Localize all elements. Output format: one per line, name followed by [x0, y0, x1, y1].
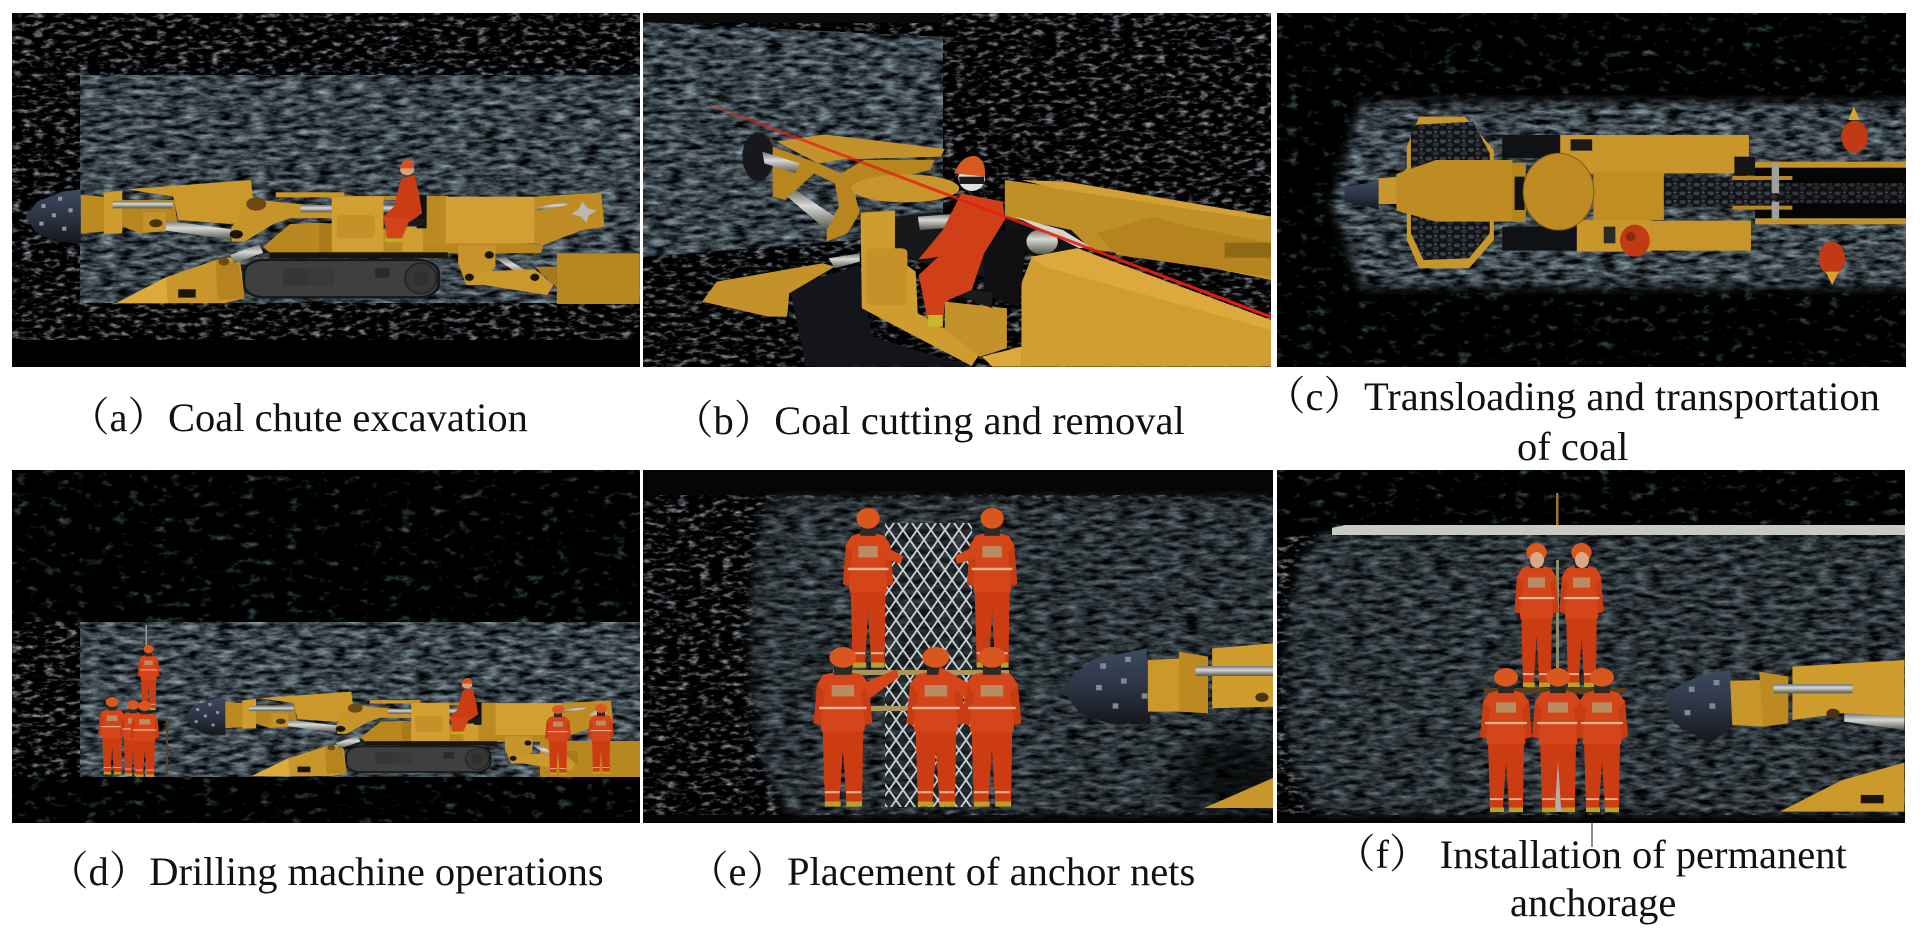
dark coal background [643, 13, 1271, 367]
support frame [1484, 688, 1626, 812]
caption b: （b）Coal cutting and removal [673, 398, 1185, 443]
lit rock face [742, 490, 1273, 820]
caption c: （c）Transloading and transportation [1265, 374, 1880, 419]
panel: (f) installation of permanent anchorage [1277, 470, 1905, 823]
panel: (b) coal cutting and removal [643, 13, 1271, 367]
miner top view lower [1819, 242, 1845, 285]
drill rod and support [146, 625, 168, 777]
miner near machine rear [545, 705, 571, 775]
roadheader machine [26, 160, 640, 304]
caption d: （d）Drilling machine operations [48, 849, 604, 894]
front shovel [1204, 778, 1273, 808]
miner lower left [1480, 668, 1532, 812]
leader line under panel f [1591, 823, 1593, 847]
roadheader top view [1345, 107, 1906, 285]
caption c: of coal [1517, 424, 1628, 469]
lit roadway rock face [80, 622, 640, 777]
operator top view [1620, 225, 1650, 257]
miner centre [120, 700, 140, 776]
caption a: （a）Coal chute excavation [69, 395, 528, 440]
miner lower centre [907, 647, 965, 807]
lit roadway floor [1325, 95, 1906, 295]
central drill column [1550, 750, 1568, 812]
panel: (d) drilling machine operations [12, 470, 640, 823]
miner right [130, 701, 159, 777]
panel: (a) coal chute excavation [12, 13, 640, 367]
miner upper right [955, 508, 1017, 668]
miner lower left [814, 647, 899, 807]
cutter head and boom [1063, 643, 1273, 724]
dark coal background [1277, 13, 1906, 367]
caption f: anchorage [1510, 880, 1676, 925]
miner at far right [588, 704, 614, 774]
seated operator with hard hat [919, 156, 1005, 328]
anchor rod [1556, 560, 1559, 688]
miner top view upper [1841, 107, 1868, 153]
red laser guide line [710, 105, 1271, 317]
lit rock face [643, 20, 943, 260]
dark coal background [12, 470, 640, 823]
lit roadway rock face [80, 75, 640, 303]
platform bars [833, 670, 1009, 711]
caption f: （f） Installation of permanent [1335, 832, 1847, 877]
caption f [1335, 832, 1847, 925]
caption e: （e）Placement of anchor nets [688, 849, 1195, 894]
lit rock face [1280, 525, 1905, 820]
white roof strip [1332, 525, 1905, 535]
conveyor tail [540, 741, 640, 777]
dark coal background [1277, 470, 1905, 823]
cutter and boom [1664, 660, 1904, 812]
roof bolt rod [1556, 493, 1558, 526]
miner lower right [1576, 668, 1628, 812]
caption c [1265, 374, 1880, 469]
dark surrounding coal seam [12, 13, 640, 367]
roadheader close-up [702, 133, 1271, 367]
miner upper right [1559, 543, 1604, 687]
miner upper left [843, 508, 903, 668]
dark floor shadow near shovel [1175, 737, 1295, 813]
roadheader machine [184, 678, 639, 777]
miner on platform [138, 645, 160, 710]
miner lower right [938, 647, 1021, 807]
anchor net [885, 523, 972, 807]
dark coal background [643, 470, 1273, 823]
miner upper left [1514, 543, 1559, 687]
panel: (c) transloading and transportation of coal [1277, 13, 1906, 367]
miner left [98, 697, 126, 774]
miner lower centre [1532, 668, 1584, 812]
panel: (e) placement of anchor nets [643, 470, 1295, 823]
